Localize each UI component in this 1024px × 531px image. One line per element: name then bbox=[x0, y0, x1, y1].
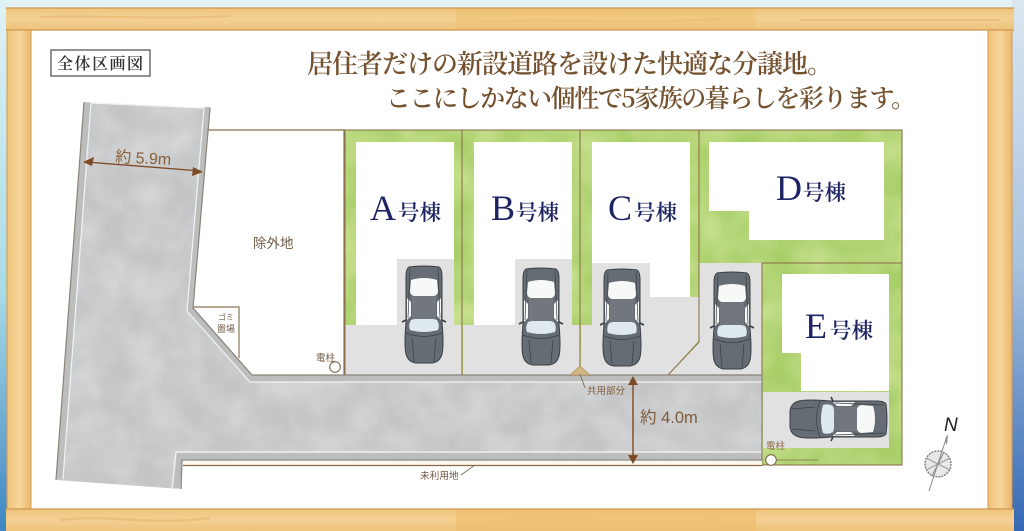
building label A bbox=[370, 188, 442, 228]
shared part marker: 共用部分 bbox=[587, 386, 626, 397]
building label A: A bbox=[370, 188, 396, 228]
label: excluded land: 除外地 bbox=[253, 236, 294, 251]
building label A: 号棟 bbox=[398, 196, 442, 227]
car B bbox=[519, 268, 563, 365]
building label C: C bbox=[608, 188, 632, 228]
label: garbage area: 置場 bbox=[217, 323, 235, 334]
unused land strip bbox=[183, 461, 762, 466]
building label D: 号棟 bbox=[803, 176, 847, 207]
building label E bbox=[805, 306, 874, 346]
building label D: D bbox=[776, 168, 802, 208]
building label D bbox=[776, 168, 847, 208]
lot panel: A to D green base bbox=[345, 130, 902, 375]
label: garbage area: ゴミ bbox=[218, 312, 234, 322]
car A bbox=[402, 266, 446, 363]
dimension: road width 5.9m bbox=[83, 148, 203, 176]
utility pole left: 電柱 bbox=[316, 352, 336, 364]
title: ここにしかない個性で5家族の暮らしを彩ります。 bbox=[386, 79, 916, 115]
car E bbox=[790, 397, 887, 441]
building label B: B bbox=[491, 188, 515, 228]
dimension: road width 4.0m bbox=[628, 376, 698, 464]
lot panel: E green base bbox=[762, 263, 902, 465]
car D bbox=[710, 272, 754, 369]
utility pole left bbox=[316, 352, 340, 372]
heading: 全体区画図 label box: 全体区画図 bbox=[57, 51, 143, 74]
building label C bbox=[608, 188, 678, 228]
dimension: road width 4.0m: 約 4.0m bbox=[640, 408, 698, 427]
icon: north compass: N bbox=[944, 415, 958, 436]
building label B bbox=[491, 188, 560, 228]
title: 居住者だけの新設道路を設けた快適な分譲地。 bbox=[307, 44, 833, 81]
icon: north compass bbox=[925, 415, 958, 491]
label: garbage area bbox=[217, 312, 235, 334]
buildings: white footprints bbox=[356, 142, 889, 391]
title bbox=[307, 44, 916, 115]
label: unused land bbox=[420, 465, 475, 482]
driveways bbox=[345, 259, 889, 448]
road bbox=[56, 102, 762, 489]
dimension: road width 5.9m: 約 5.9m bbox=[115, 148, 172, 169]
utility pole right: 電柱 bbox=[766, 440, 786, 452]
shared part marker bbox=[570, 366, 626, 397]
label: unused land: 未利用地 bbox=[420, 469, 459, 482]
car C bbox=[600, 269, 644, 366]
building label E: E bbox=[805, 306, 827, 346]
building label E: 号棟 bbox=[830, 314, 874, 345]
excluded land outline bbox=[193, 130, 344, 375]
building label B: 号棟 bbox=[516, 196, 560, 227]
building label C: 号棟 bbox=[634, 196, 678, 227]
lot boundary lines bbox=[208, 130, 902, 465]
utility pole right bbox=[766, 440, 818, 465]
